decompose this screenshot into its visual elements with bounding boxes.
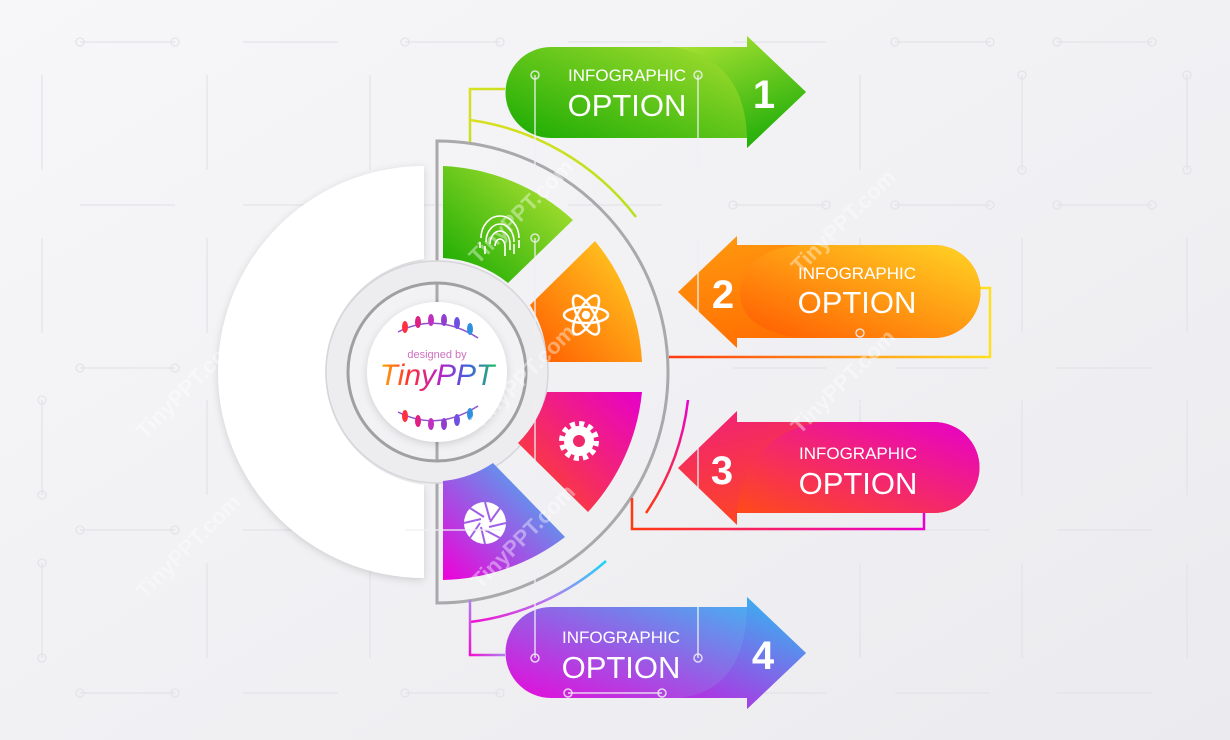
overlay grid nodes — [405, 71, 864, 697]
wedge 2 orange — [530, 241, 642, 362]
center logo: designed by — [407, 349, 467, 361]
arrow 4: OPTION — [562, 650, 680, 685]
arrow 1 — [506, 36, 806, 148]
arrow 4: INFOGRAPHIC — [562, 628, 680, 647]
arrow 1: INFOGRAPHIC — [568, 66, 686, 85]
watermarks: TinyPPT.com — [131, 329, 245, 444]
watermarks: TinyPPT.com — [786, 164, 900, 279]
arrow 3 — [678, 411, 980, 525]
white half disk — [218, 166, 424, 578]
arrow 1: 1 — [753, 73, 775, 117]
icon: atom — [564, 292, 608, 338]
arrow 3: 3 — [711, 449, 733, 493]
icon: gear — [562, 424, 596, 458]
center logo — [367, 302, 507, 442]
arrow 2: 2 — [712, 273, 734, 317]
icon: fingerprint — [480, 216, 519, 256]
watermarks: TinyPPT.com — [464, 154, 578, 269]
arrow 4: 4 — [752, 634, 775, 678]
watermarks — [131, 154, 900, 604]
center rings — [326, 261, 548, 483]
connector: red bracket — [632, 498, 924, 529]
arrow 2: OPTION — [798, 285, 916, 320]
watermarks: TinyPPT.com — [786, 324, 900, 439]
connector: cyan — [470, 561, 606, 655]
icon: aperture — [464, 502, 506, 544]
wedge 1 green — [443, 166, 573, 283]
watermarks: TinyPPT.com — [466, 479, 580, 594]
connector: magenta arc — [646, 400, 688, 513]
center logo: TinyPPT — [380, 359, 497, 392]
wedge 3 magenta — [518, 392, 642, 512]
arrow 4 — [506, 597, 806, 709]
arrow 3: INFOGRAPHIC — [799, 444, 917, 463]
watermarks: TinyPPT.com — [131, 489, 245, 604]
wedge 4 purple — [443, 463, 565, 580]
sector outline — [437, 141, 668, 603]
arrow 1: OPTION — [568, 88, 686, 123]
arrow 2: INFOGRAPHIC — [798, 264, 916, 283]
connector: orange — [669, 288, 990, 357]
arrow 3: OPTION — [799, 466, 917, 501]
connector: green — [470, 89, 636, 217]
watermarks: TinyPPT.com — [466, 319, 580, 434]
arrow 2 — [678, 236, 980, 348]
